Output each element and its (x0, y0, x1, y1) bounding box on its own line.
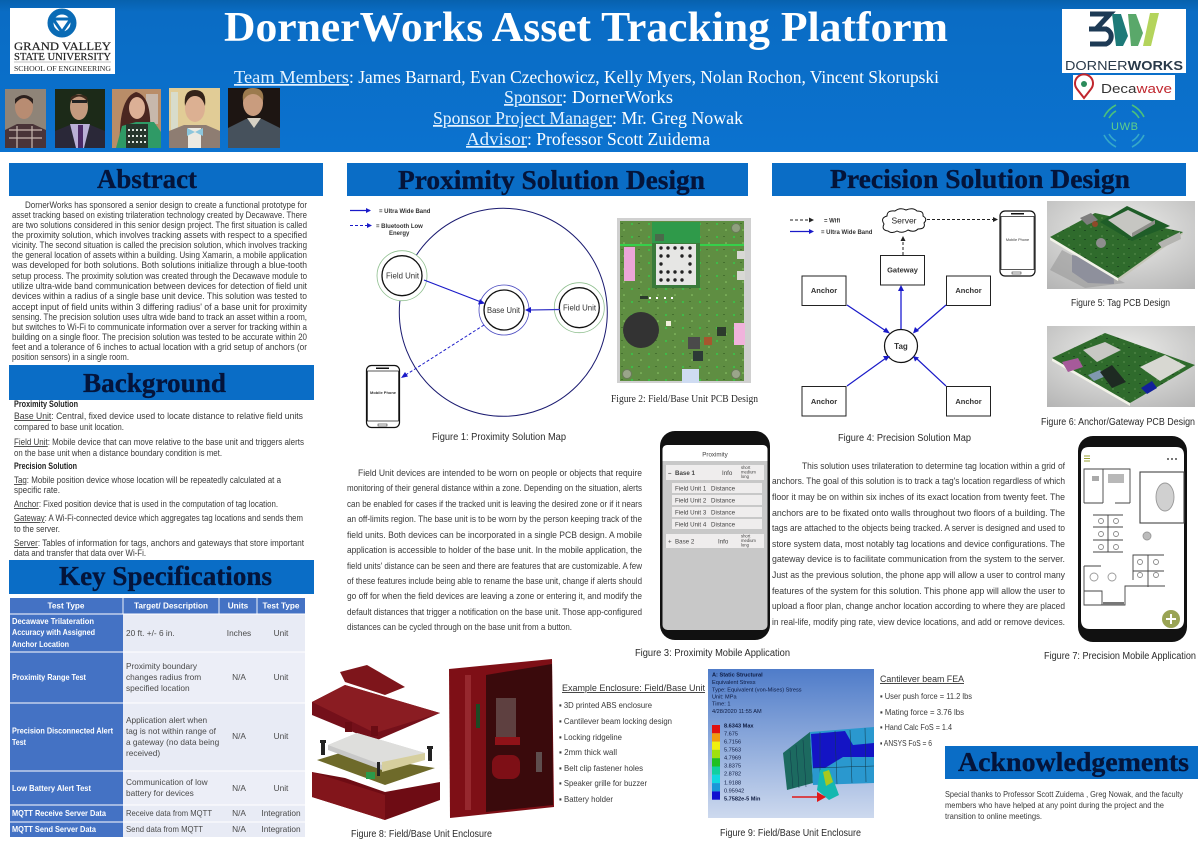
enclosure feature list: ▪ 2mm thick wall (559, 747, 617, 757)
field unit rows: Distance (711, 522, 736, 528)
key specifications table: Accuracy with Assigned (12, 628, 95, 637)
field unit right (554, 283, 604, 333)
team credits: Sponsor (504, 87, 562, 107)
background text: data and transfer that data over Wi-Fi. (14, 548, 146, 558)
FEA info text: Type: Equivalent (von-Mises) Stress (712, 688, 802, 694)
key specifications table: Test (12, 738, 26, 747)
tag: Tag (894, 342, 908, 351)
key specifications table: Test Type (47, 602, 85, 610)
stress color legend: 8.6343 Max (724, 724, 754, 730)
key specifications table: specified location (126, 683, 190, 693)
stress color legend: 5.7563 (724, 748, 741, 754)
proximity text: can be enabled for cases if the tracked unit is leaving the desired zone or if it nears (347, 498, 642, 509)
field unit rows: Field Unit 1 (675, 486, 707, 492)
team credits: Team Members (234, 67, 349, 87)
base 2 row: long (741, 542, 750, 548)
enclosure feature list: ▪ Cantilever beam locking design (559, 716, 672, 726)
heading: Proximity Solution Design (347, 163, 748, 196)
background text: to the server. (14, 524, 60, 534)
legend: ultra wide band (790, 229, 873, 236)
caption: figure 2: Figure 2: Field/Base Unit PCB Design (611, 394, 758, 405)
heading: Key Specifications (9, 560, 314, 594)
key specifications table: Inches (227, 628, 251, 638)
wifi arrows (900, 217, 998, 255)
background text: Field Unit: Mobile device that can move relative to the base unit and triggers alerts (14, 437, 305, 447)
key specifications table: N/A (232, 672, 246, 682)
precision text: store system data, most notably tag locations and device configurations. The (772, 538, 1065, 549)
photo 2 (55, 89, 105, 148)
key specifications table: MQTT Receive Server Data (12, 809, 106, 818)
FEA info text: 4/28/2020 11:55 AM (712, 709, 762, 715)
key specifications table: Integration (261, 808, 301, 818)
caption: figure 9: Figure 9: Field/Base Unit Enclosure (720, 828, 861, 839)
FEA results list: ▪ Mating force = 3.76 lbs (880, 707, 964, 717)
precision text (772, 460, 1065, 627)
logo: UWB: UWB (1111, 121, 1138, 133)
logo: Decawave: Deca wave (1101, 81, 1172, 96)
base unit (479, 285, 529, 335)
abstract text: vicinity. The second situation is called the precision solution, which involves tracking (12, 240, 307, 250)
background text: Tag: Mobile position device whose location will be repeatedly calculated at a (14, 475, 281, 485)
field unit rows: Distance (711, 498, 736, 504)
base 1 row: long (741, 474, 750, 479)
base 1 row: Base 1 (675, 470, 696, 477)
logo: Grand Valley State University (10, 8, 115, 74)
anchor top right (946, 276, 990, 306)
precision text: Just as the previous solution, the phone app will allow a user to control many (772, 569, 1065, 580)
FEA results list (880, 674, 972, 748)
key specifications table: Communication of low (126, 777, 209, 787)
precision text: tags are attached to the objects being tracked. A server is designed and used to (772, 522, 1065, 533)
precision text: floor it may be on within six inches of its exact location from twenty feet. The (772, 491, 1065, 502)
key specifications table: Test Type (262, 602, 300, 610)
key specifications table (10, 598, 305, 837)
proximity text: application is accessible to holder of the base unit. In the mobile application, the (347, 544, 642, 555)
team credits: : Mr. Greg Nowak (612, 108, 743, 128)
stress color legend: 7.675 (724, 732, 738, 738)
UWB arrows (847, 285, 946, 386)
team credits: Advisor (466, 129, 527, 149)
heading: Background: Background (83, 368, 226, 398)
key specifications table: Target/ Description (134, 602, 208, 610)
anchor top left: Anchor (811, 286, 837, 295)
key specifications table: changes radius from (126, 672, 201, 682)
proximity text: field units' distance can be seen and there are features that are customizable. A few (347, 560, 642, 571)
lid (312, 685, 440, 741)
key specifications table: 20 ft. +/- 6 in. (126, 628, 175, 638)
stress color legend: 6.7156 (724, 740, 741, 746)
abstract text: devices within a radius of a single base unit device. This solution was tested to (12, 291, 307, 301)
background text: compared to base unit location. (14, 422, 124, 432)
background text: on the base unit when a distance boundary condition is met. (14, 448, 222, 458)
field unit rows: Field Unit 3 (675, 510, 707, 516)
field unit left: Field Unit (386, 272, 420, 280)
key specifications table: Unit (274, 731, 289, 741)
heading: Key Specifications: Key Specifications (59, 561, 272, 591)
key specifications table: Receive data from MQTT (126, 808, 212, 818)
server cloud (883, 209, 926, 232)
abstract text: but switches to Wi-Fi to communicate information over a server for tracking within a (12, 322, 307, 332)
logo: DornerWorks: DORNER WORKS (1065, 58, 1183, 73)
stress color legend: 4.7969 (724, 756, 741, 762)
legend: bluetooth: = Bluetooth Low (376, 224, 423, 230)
figure 4: precision solution map (790, 209, 1035, 416)
key specifications table: N/A (232, 783, 246, 793)
header band (0, 0, 1198, 152)
stress color legend: 1.9188 (724, 780, 741, 786)
enclosure feature list: ▪ Speaker grille for buzzer (559, 778, 647, 788)
background text: Server: Tables of information for tags, anchors and gateways that store important (14, 538, 305, 548)
anchor bottom left: Anchor (811, 397, 837, 406)
proximity text: an off-limits region. The base unit is to be worn by the person keeping track of the (347, 513, 642, 524)
FEA results list: ▪ Hand Calc FoS = 1.4 (880, 722, 952, 732)
title: DornerWorks Asset Tracking Platform (224, 5, 948, 51)
FEA info text (712, 672, 802, 715)
mobile phone (366, 366, 400, 428)
anchor top right: Anchor (955, 286, 982, 295)
proximity text: monitoring of their general distance within a zone. Depending on the situation, alerts (347, 482, 642, 493)
floor plan (1084, 469, 1184, 605)
figure 6: anchor gateway PCB (1047, 326, 1195, 407)
precision text: features of the system for this solution. This phone app will allow the user to (772, 585, 1065, 596)
figure 8: exploded enclosure (312, 665, 440, 820)
key specifications table: Decawave Trilateration (12, 617, 94, 626)
heading: Abstract: Abstract (97, 164, 197, 194)
background text: specific rate. (14, 485, 60, 495)
logo: Decawave (1073, 74, 1175, 100)
stress color legend: 3.8375 (724, 764, 741, 770)
legend: ultra wide band: = Ultra Wide Band (821, 230, 873, 236)
stress color legend: 5.7582e-5 Min (724, 796, 761, 802)
enclosure feature list: ▪ Belt clip fastener holes (559, 763, 643, 773)
figure 1: proximity solution map (350, 208, 607, 428)
legend: ultra wide band: = Ultra Wide Band (379, 209, 431, 215)
field unit left (377, 251, 427, 301)
heading: Abstract (9, 163, 323, 196)
menu icons (1084, 456, 1178, 461)
board (317, 753, 435, 785)
team credits: : Professor Scott Zuidema (527, 129, 710, 149)
proximity text: distances can be cycled through on the base unit from a button. (347, 621, 572, 632)
stress color legend: 0.95942 (724, 788, 744, 794)
FEA info text: Time: 1 (712, 702, 730, 708)
FEA results list: Cantilever beam FEA (880, 674, 964, 684)
stress color legend: 2.8782 (724, 772, 741, 778)
enclosure feature list (559, 683, 705, 804)
field unit rows: Distance (711, 486, 736, 492)
logo: Grand Valley State University: SCHOOL OF ENGINEERING (14, 64, 112, 73)
enclosure feature list: ▪ Locking ridgeline (559, 732, 622, 742)
heading: Proximity Solution Design: Proximity Solution Design (398, 165, 705, 195)
photo 4 (169, 88, 220, 148)
figure 8: assembled enclosure (449, 659, 554, 818)
background text: Proximity Solution (14, 399, 78, 409)
key specifications table: Send data from MQTT (126, 824, 203, 834)
field unit right: Field Unit (563, 304, 597, 312)
key specifications table: N/A (232, 808, 246, 818)
field unit rows: Field Unit 4 (675, 522, 707, 528)
caption: figure 3: Figure 3: Proximity Mobile Application (635, 648, 790, 659)
abstract text: DornerWorks has sponsored a senior design to create a functional prototype for (25, 200, 307, 210)
photo 1 (5, 89, 46, 148)
logo: UWB (1104, 105, 1144, 147)
arrows (401, 280, 560, 378)
key specifications table: Unit (274, 672, 289, 682)
key specifications table: Unit (274, 628, 289, 638)
abstract text: are two solutions considered in this senior design project. The first situation is called (12, 220, 307, 230)
cantilever beam mesh (783, 727, 874, 802)
lower case (312, 772, 440, 820)
background text: Precision Solution (14, 461, 77, 471)
proximity text: of these features include being able to rename the base unit, change if alerts should (347, 575, 642, 586)
background text: Gateway: A Wi-Fi-connected device which aggregates tag locations and sends them (14, 513, 303, 523)
precision text: This solution uses trilateration to determine tag location within a grid of (802, 460, 1065, 471)
base 2 row: + (668, 538, 672, 546)
enclosure feature list: ▪ 3D printed ABS enclosure (559, 700, 652, 710)
key specifications table: N/A (232, 824, 246, 834)
abstract text: the proximity solution, which involves tracking assets with respect to a specified (12, 230, 307, 240)
key specifications table: Low Battery Alert Test (12, 784, 91, 793)
legend: ultra wide band (350, 208, 431, 215)
photo 3 (112, 89, 161, 148)
legend: wifi (790, 218, 840, 224)
mobile phone: Mobile Phone (370, 390, 397, 395)
acknowledgements text: transition to online meetings. (945, 811, 1042, 821)
abstract text: sensing. The precision solution uses ultra wide band to track an asset within a room, (12, 312, 307, 322)
anchor bottom right: Anchor (955, 397, 982, 406)
enclosure feature list: ▪ Battery holder (559, 794, 613, 804)
proximity text: field units. Both devices can be incorporated in a single PCB design. A mobile (347, 529, 642, 540)
FEA info text: Unit: MPa (712, 694, 737, 700)
RF module shield (656, 244, 696, 285)
precision text: gateway device is to facilitate communication from the system to the server. (772, 553, 1065, 564)
logo: DornerWorks (1062, 9, 1186, 73)
logo: Grand Valley State University: STATE UNIVERSITY (14, 52, 111, 63)
key specifications table: Application alert when (126, 715, 208, 725)
proximity text: go off for when the field devices are leaving a zone or entering it, and modify the (347, 590, 642, 601)
caption: figure 5: Figure 5: Tag PCB Design (1071, 298, 1170, 309)
field unit rows: Distance (711, 510, 736, 516)
background text (14, 399, 305, 558)
key specifications table: Proximity Range Test (12, 673, 86, 682)
figure 2: PCB (617, 218, 751, 383)
background text: Base Unit: Central, fixed device used to locate distance to relative field units (14, 411, 304, 421)
FEA results list: ▪ User push force = 11.2 lbs (880, 691, 972, 701)
heading: Precision Solution Design (772, 163, 1186, 196)
base 2 row (666, 534, 764, 548)
acknowledgements text (945, 789, 1184, 821)
key specifications table: Proximity boundary (126, 661, 198, 671)
abstract text: feet and a tolerance of 6 inches to actual location with a grid setup of anchors (or (12, 342, 307, 352)
acknowledgements text: members who have helped at any point during the project and the (945, 800, 1164, 810)
team credits: Sponsor Project Manager (433, 108, 612, 128)
legend: wifi: = Wifi (824, 218, 840, 224)
abstract text: utilize ultra-wide band communication between devices for detection of field unit (12, 281, 308, 291)
tag (884, 330, 918, 362)
mobile phone: Mobile Phone (1006, 238, 1029, 242)
FEA info text: A: Static Structural (712, 672, 763, 678)
abstract text: accept input of field units within 3 differing radius' of a base unit for proximity (12, 302, 308, 312)
abstract text: position sensors) in a single room. (12, 352, 129, 362)
abstract text: setup process. The proximity solution was created through the Decawave module to (12, 271, 307, 281)
base 2 row: medium (741, 538, 756, 543)
figure 3: proximity mobile application (660, 431, 770, 640)
precision text: anchors are to be fixated onto walls throughout two floors of a building. The (772, 507, 1065, 518)
key specifications table: Anchor Location (12, 640, 69, 649)
abstract text: the general location of assets within a building. Using Xamarin, a mobile application (12, 250, 307, 260)
key specifications table: a gateway (no data being (126, 737, 220, 747)
legend: bluetooth: Energy (389, 231, 410, 237)
caption: figure 8: Figure 8: Field/Base Unit Enclosure (351, 829, 492, 840)
precision text: in real-life, modify ping rate, view device locations, and add or remove devices. (772, 616, 1065, 627)
base 1 row: – (668, 470, 672, 477)
team photos (5, 88, 280, 148)
heading: Acknowledgements: Acknowledgements (958, 747, 1189, 777)
key specifications table: battery for devices (126, 788, 194, 798)
base unit: Base Unit (487, 306, 521, 315)
gateway: Gateway (887, 266, 919, 274)
figure 3: proximity mobile application: Proximity (702, 452, 729, 458)
base 2 row: Info (718, 538, 729, 546)
base 2 row: Base 2 (675, 538, 695, 546)
background text: Anchor: Fixed position device that is used in the computation of tag location. (14, 499, 278, 509)
legend: bluetooth (350, 223, 423, 237)
photo 5 (228, 88, 280, 148)
battery (328, 733, 425, 772)
abstract text: was developed for both solutions. Both solutions initialize through a blue-tooth (11, 260, 307, 270)
heading: Background (9, 365, 314, 400)
precision text: upload a floor plan, change anchor location according to where they are placed (772, 600, 1065, 611)
caption: figure 1: Figure 1: Proximity Solution Map (432, 432, 566, 443)
server cloud: Server (891, 216, 917, 226)
anchor bottom left (802, 386, 846, 416)
key specifications table: tag is not within range of (126, 726, 217, 736)
base 1 row (666, 465, 764, 480)
team credits: : DornerWorks (562, 87, 673, 107)
key specifications table: received) (126, 748, 160, 758)
gateway (880, 256, 924, 285)
base 2 row: short (741, 534, 751, 538)
base 1 row: medium (741, 470, 756, 474)
add button (1162, 610, 1180, 628)
heading: Precision Solution Design: Precision Solution Design (830, 164, 1130, 194)
key specifications table: Unit (274, 783, 289, 793)
key specifications table: Units (228, 602, 249, 610)
anchor top left (802, 276, 846, 306)
anchor bottom right (946, 386, 990, 416)
precision text: anchors. The goal of this solution is to track a tag's location regardless of which (772, 475, 1065, 486)
logo: Grand Valley State University: GRAND VALLEY (14, 39, 111, 53)
stress color legend (712, 724, 761, 802)
screws (320, 740, 433, 776)
FEA info text: Equivalent Stress (712, 680, 756, 686)
proximity text (347, 467, 642, 632)
key specifications table: Precision Disconnected Alert (12, 726, 113, 736)
key specifications table: MQTT Send Server Data (12, 825, 96, 834)
key specifications table: N/A (232, 731, 246, 741)
abstract text: building on a single floor. The precision solution was tested to be accurate within 20 (12, 332, 307, 342)
figure 9: FEA simulation (708, 669, 874, 818)
FEA results list: ▪ ANSYS FoS = 6 (880, 738, 932, 748)
proximity text: Field Unit devices are intended to be worn on people or objects that require (358, 467, 642, 478)
key specifications table: Integration (261, 824, 301, 834)
field unit rows: Field Unit 2 (675, 498, 707, 504)
mobile phone (1000, 211, 1035, 276)
clip tab (340, 665, 405, 695)
caption: figure 4: Figure 4: Precision Solution Map (838, 433, 971, 444)
team credits: : James Barnard, Evan Czechowicz, Kelly Myers, Nolan Rochon, Vincent Skorupski (349, 67, 939, 87)
field unit rows (672, 483, 762, 529)
abstract text: asset tracking based on existing trilateration technology created by Decawave. There (12, 210, 307, 220)
abstract text (11, 200, 308, 362)
figure 5: tag PCB (1047, 201, 1195, 289)
base 1 row: Info (722, 470, 733, 477)
load arrow (792, 792, 826, 802)
figure 7: precision mobile application (1078, 436, 1187, 642)
enclosure feature list: Example Enclosure: Field/Base Unit (562, 683, 705, 693)
team credits (234, 67, 939, 149)
proximity text: default distances that trigger a notification on the base unit. Those app-configured (347, 606, 642, 617)
base 1 row: short (741, 465, 751, 470)
